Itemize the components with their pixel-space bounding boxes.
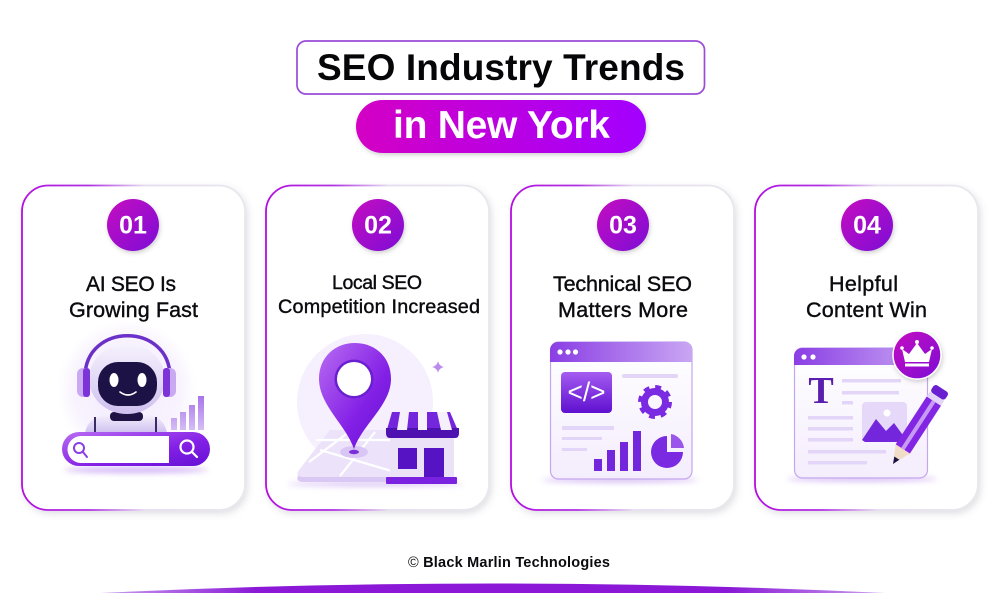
- panel: Technical SEO: [511, 186, 734, 510]
- icon: robot with headphones and search bar: [57, 320, 210, 473]
- icon: browser window with code, gear and charts: </>: [568, 377, 606, 407]
- badge 01: 01: [119, 212, 147, 240]
- panel: Helpful Content: [755, 186, 978, 510]
- icon: content page with crown and pencil: T: [808, 370, 834, 412]
- heading: AI SEO Is Growing Fast: AI SEO Is: [86, 273, 176, 296]
- subtitle pill: in New York: in New York: [393, 104, 610, 147]
- icon: location pin, map and storefront: [287, 334, 463, 486]
- panel: AI SEO: [22, 186, 245, 510]
- heading: Technical SEO Matters More: [553, 272, 692, 322]
- heading: AI SEO Is Growing Fast: [69, 273, 198, 322]
- heading: Helpful Content Win: Helpful: [829, 272, 898, 296]
- heading: Local SEO Competition Increased: Competition Increased: [278, 296, 480, 318]
- heading: Local SEO Competition Increased: Local SEO: [332, 272, 422, 294]
- panel: Local SEO: [266, 186, 489, 510]
- badge 02: [352, 199, 404, 251]
- badge 02: 02: [364, 212, 392, 240]
- title: SEO Industry Trends: SEO Industry Trends: [317, 47, 685, 88]
- heading: Technical SEO Matters More: Matters More: [558, 298, 688, 322]
- badge 03: 03: [609, 212, 637, 240]
- badge 01: [107, 199, 159, 251]
- footer arc: [100, 584, 885, 593]
- heading: AI SEO Is Growing Fast: Growing Fast: [69, 298, 198, 322]
- title: SEO Industry Trends: [297, 41, 704, 94]
- heading: Helpful Content Win: Content Win: [806, 298, 927, 322]
- footer credit: © Black Marlin Technologies: [408, 555, 610, 571]
- icon: content page with crown and pencil: [787, 331, 949, 482]
- badge 04: [841, 199, 893, 251]
- heading: Technical SEO Matters More: Technical SEO: [553, 272, 692, 296]
- heading: Local SEO Competition Increased: [278, 272, 480, 318]
- subtitle pill: in New York: [356, 100, 646, 153]
- heading: Helpful Content Win: [806, 272, 927, 322]
- icon: browser window with code, gear and charts: [542, 342, 698, 482]
- badge 04: 04: [853, 212, 881, 240]
- badge 03: [597, 199, 649, 251]
